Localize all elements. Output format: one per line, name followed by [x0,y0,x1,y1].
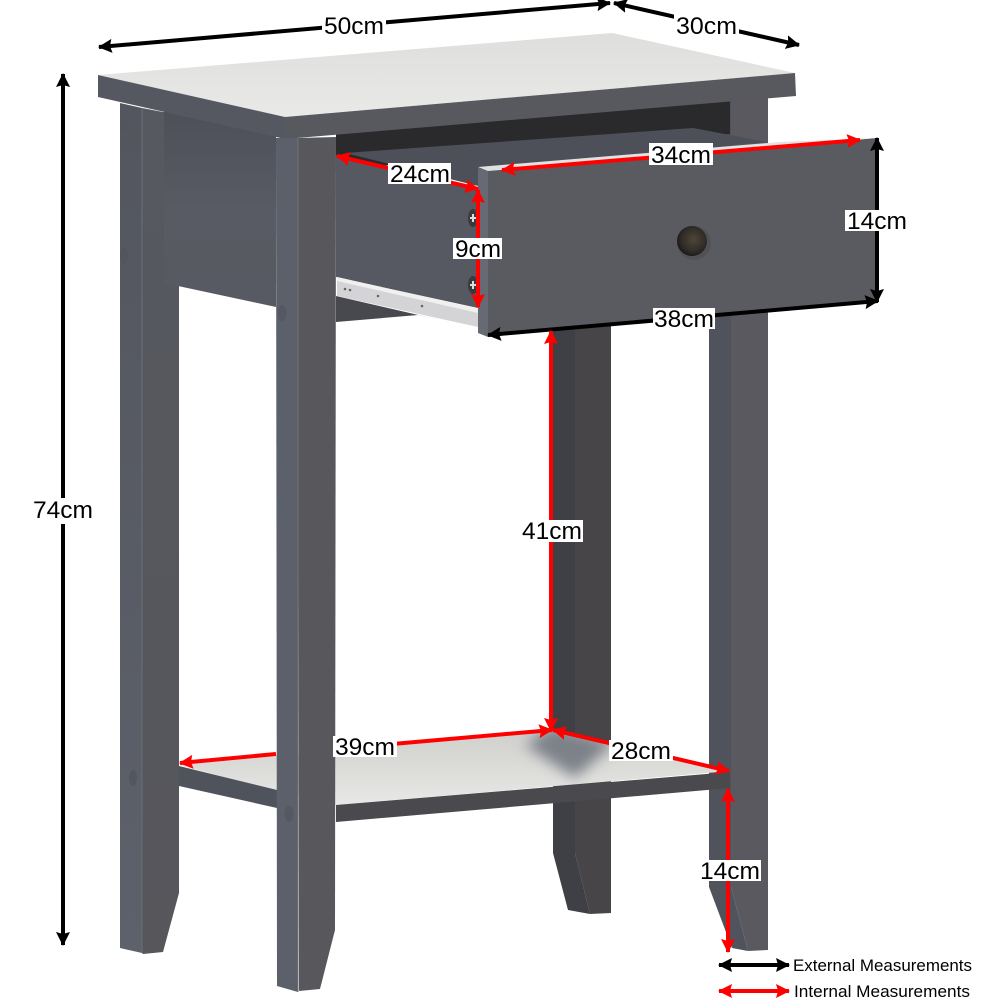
black measurement arrows [63,3,878,945]
label: 50cm: 50cm [324,13,384,40]
front left leg [276,137,336,992]
arrow: 14cm shelf clearance [726,789,730,952]
drawer side [336,155,478,308]
label: 24cm: 24cm [390,161,450,188]
label: 14cm shelf: 14cm [700,858,760,885]
drawer rail below slide [336,296,440,322]
arrow: 30cm depth [614,3,799,45]
arrow: 24cm drawer depth [337,156,478,189]
drawer interior [345,128,767,186]
arrow: 9cm drawer inner height [476,190,480,307]
side apron [164,110,276,307]
arrow: 41cm clearance [549,331,553,731]
under-top shadow and back rail [336,95,730,170]
label: 38cm: 38cm [654,306,714,333]
arrow: 28cm shelf depth [553,730,729,771]
label: 34cm: 34cm [651,142,711,169]
drawer top lip [478,138,877,171]
arrow: 14cm drawer height [875,138,879,302]
table top [98,33,796,139]
label: 41cm: 41cm [522,518,582,545]
red measurement arrows [180,140,860,952]
labels [32,12,907,885]
drawer slide [337,277,478,327]
drawer front edge [478,168,488,337]
arrow: 34cm drawer inner width [502,140,860,170]
arrow: 39cm shelf width, right part [336,730,552,749]
drawer screws [468,209,478,294]
label: 28cm: 28cm [611,738,671,765]
label: 9cm: 9cm [455,236,501,263]
drawer front [488,138,877,337]
legend [719,956,972,1000]
knob [677,226,711,260]
arrow: 39cm shelf width, left part [180,754,276,763]
arrow: 38cm drawer width [488,301,878,335]
back middle leg [553,300,611,914]
back left leg [120,103,179,954]
legend: external: External Measurements [793,956,972,975]
shelf [179,725,730,822]
drawer side top edge [440,178,478,189]
label: 39cm: 39cm [335,734,395,761]
drawer [336,128,877,337]
label: 14cm drawer: 14cm [847,208,907,235]
label: 30cm: 30cm [676,13,737,40]
arrow: 50cm width [99,3,610,47]
arrow: 74cm height [61,74,65,945]
back right leg [709,97,768,951]
label: 74cm: 74cm [33,497,93,524]
